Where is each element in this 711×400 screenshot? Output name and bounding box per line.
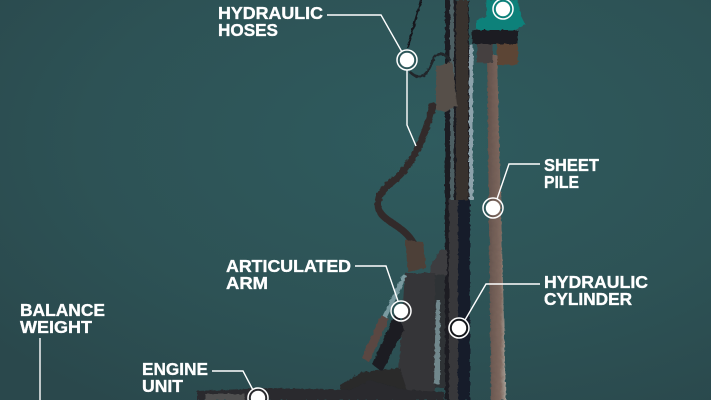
label: hydraulic cylinder: CYLINDER — [544, 289, 632, 309]
label: sheet pile: SHEET — [544, 155, 599, 175]
label: balance weight — [20, 300, 105, 400]
hydraulic hoses — [378, 0, 450, 244]
label: hydraulic cylinder: HYDRAULIC — [544, 272, 648, 292]
machine: mast, pile, hoses, arm, base — [197, 0, 525, 400]
label: articulated arm: ARM — [226, 273, 268, 293]
label: engine unit — [142, 359, 268, 400]
hose clamp block — [436, 62, 457, 112]
sheet pile — [487, 55, 506, 400]
label: sheet pile: PILE — [544, 172, 579, 192]
label: hydraulic hoses: HOSES — [218, 20, 278, 40]
hammer head — [472, 0, 525, 65]
label: hydraulic hoses — [218, 3, 417, 146]
marker: hammer head — [493, 0, 513, 19]
label: sheet pile — [483, 155, 599, 218]
label: articulated arm — [226, 256, 411, 321]
label: hydraulic cylinder — [449, 272, 648, 338]
articulated arm — [340, 240, 447, 400]
label: balance weight: BALANCE — [20, 300, 105, 320]
mast — [445, 0, 473, 400]
label: articulated arm: ARTICULATED — [226, 256, 351, 276]
label: balance weight: WEIGHT — [20, 317, 92, 337]
label: engine unit: ENGINE — [142, 359, 208, 379]
label: hydraulic hoses: HYDRAULIC — [218, 3, 323, 23]
base — [197, 380, 444, 400]
label: engine unit: UNIT — [142, 376, 183, 396]
